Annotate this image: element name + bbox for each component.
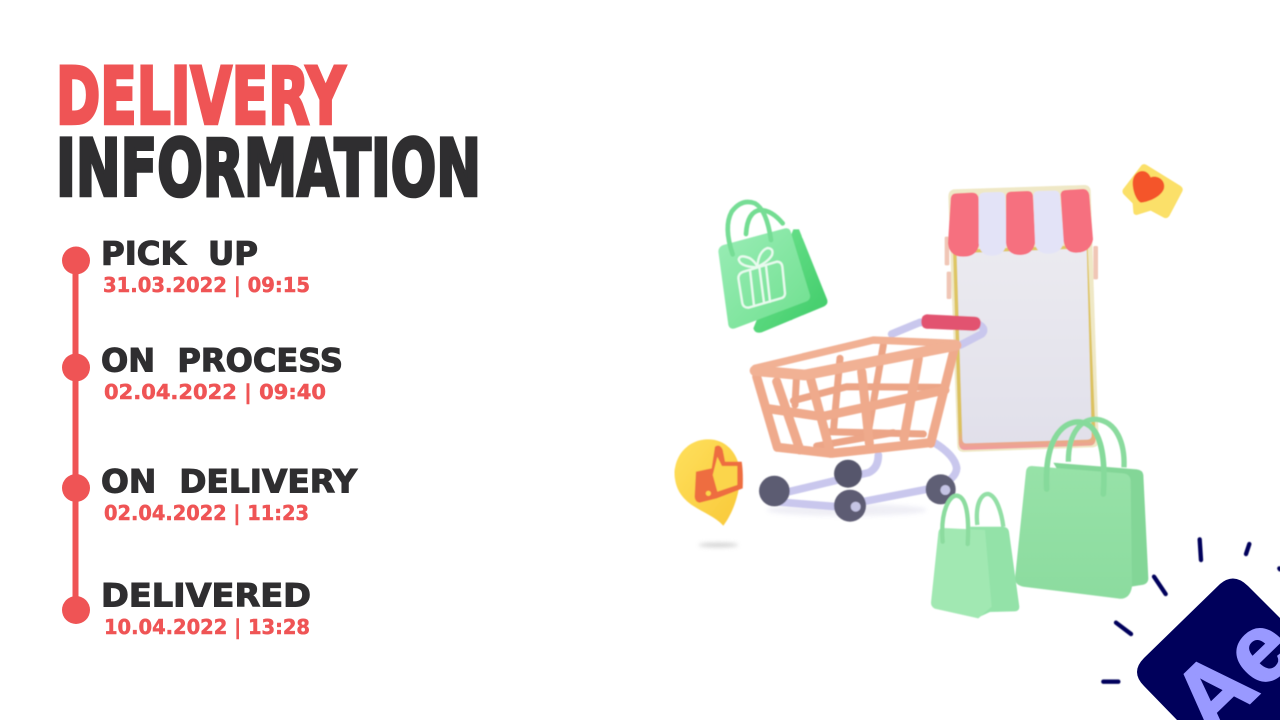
back wheel (834, 460, 862, 488)
step: delivered: DELIVERED (101, 576, 311, 614)
small bag back handle (977, 494, 1003, 527)
rays around logo (1103, 539, 1280, 682)
phone inner rim (953, 245, 1096, 450)
cart and badges (675, 202, 984, 547)
basket rim (755, 340, 956, 375)
basket rear bars (793, 345, 940, 446)
step: delivered (101, 576, 311, 639)
step: pick up: PICK UP (101, 234, 258, 272)
gift bag back panel (753, 229, 827, 333)
gift bag back handle (746, 210, 783, 234)
small bag side panel (970, 527, 1019, 617)
phone side buttons (945, 237, 1098, 299)
step: on delivery: 02.04.2022 | 11:23 (104, 501, 309, 525)
basket front bars (757, 350, 954, 453)
awning (948, 189, 1093, 257)
left wheel (759, 476, 790, 506)
thumbs up (695, 446, 743, 503)
title line: information: INFORMATION (56, 124, 481, 214)
step: on delivery (101, 462, 358, 525)
heart badge (1122, 164, 1183, 218)
timeline line (72, 260, 78, 610)
gift bag front panel (718, 228, 810, 329)
step: on process: ON PROCESS (101, 342, 343, 380)
after effects logo (1137, 578, 1280, 720)
front right wheel (926, 474, 956, 504)
cart basket (755, 340, 956, 453)
small bag (931, 494, 1019, 618)
large bag (1015, 419, 1148, 599)
step: pick up (101, 234, 310, 297)
heart (1133, 171, 1164, 203)
phone screen (957, 248, 1092, 443)
step: on delivery: ON DELIVERY (101, 462, 358, 500)
small bag front handle (942, 496, 968, 544)
gift bag front handle (728, 202, 771, 254)
title (56, 52, 481, 214)
large bag front panel (1015, 466, 1132, 599)
delivery timeline (62, 234, 358, 639)
phone body (948, 185, 1099, 452)
timeline dot: on delivery (62, 474, 90, 502)
large bag front handle (1046, 422, 1104, 494)
title line: delivery: DELIVERY (56, 52, 346, 142)
step: on process (101, 342, 343, 404)
gift bag (718, 202, 827, 333)
timeline dot: on process (62, 354, 90, 382)
cart shadow (767, 504, 927, 516)
timeline dot: pick up (62, 246, 90, 274)
shopping bags (931, 419, 1280, 682)
step: on process: 02.04.2022 | 09:40 (104, 380, 326, 404)
logo tile (1137, 578, 1280, 720)
step: delivered: 10.04.2022 | 13:28 (104, 615, 310, 639)
like badge (675, 439, 743, 547)
like pin (675, 439, 740, 526)
small bag front panel (931, 528, 992, 618)
step: pick up: 31.03.2022 | 09:15 (103, 273, 310, 297)
cart frame (772, 322, 984, 507)
shopping illustration (675, 164, 1280, 682)
front wheel (834, 490, 866, 522)
cart handle (921, 314, 981, 331)
large bag back handle (1068, 419, 1124, 467)
timeline dot: delivered (62, 596, 90, 624)
phone storefront (945, 185, 1099, 452)
gift icon (738, 248, 785, 308)
pin ground shadow (698, 543, 738, 547)
large bag back panel (1053, 463, 1148, 587)
heart bubble (1122, 164, 1183, 218)
